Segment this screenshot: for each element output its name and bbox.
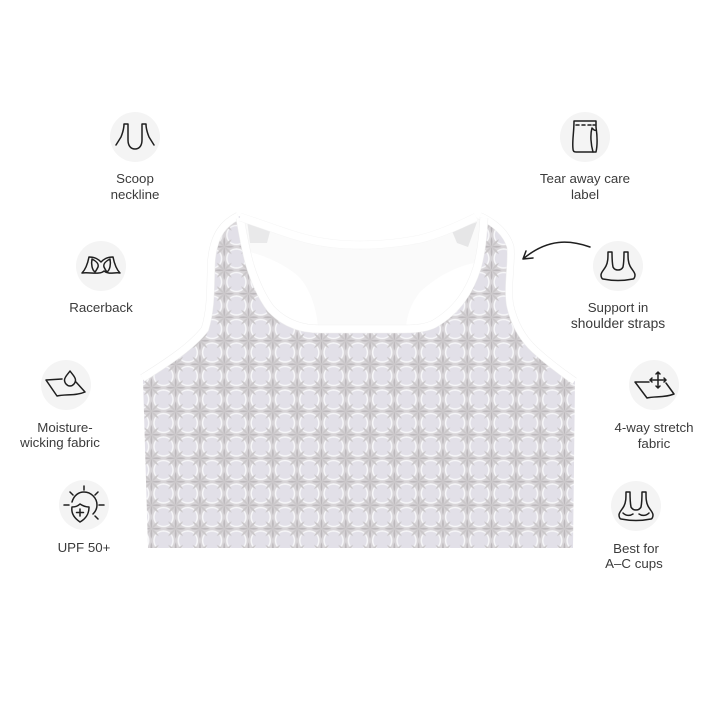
- feature: moisture-wicking fabric: [19, 360, 100, 450]
- label: 4-way stretch fabric: 4-way stretch: [614, 420, 694, 435]
- front neckline trim: [240, 218, 484, 329]
- feature: scoop neckline: [110, 112, 160, 202]
- label: tear away care label: label: [571, 187, 599, 202]
- label: scoop neckline: neckline: [111, 187, 159, 202]
- icon: racerback: [76, 241, 126, 291]
- back fabric: [240, 217, 484, 330]
- patterned body: [143, 216, 575, 548]
- label: racerback: Racerback: [69, 300, 133, 315]
- label: moisture-wicking fabric: Moisture-: [37, 420, 93, 435]
- feature: racerback: [69, 241, 133, 315]
- right mesh patch: [452, 222, 477, 247]
- arrow: points to shoulder strap: [523, 242, 590, 259]
- right strap and armhole trim: [480, 216, 574, 381]
- label: support in shoulder straps: shoulder straps: [571, 316, 665, 331]
- left strap and armhole trim: [142, 216, 238, 378]
- feature: UPF 50+: [58, 480, 111, 555]
- icon: scoop neckline: [110, 112, 160, 162]
- label: best for A–C cups: Best for: [613, 541, 659, 556]
- label: best for A–C cups: A–C cups: [605, 556, 663, 571]
- icon: fabric with four arrows: [629, 360, 679, 410]
- label: support in shoulder straps: Support in: [588, 300, 648, 315]
- feature: 4-way stretch fabric: [614, 360, 694, 451]
- icon: fabric with water drop: [41, 360, 91, 410]
- back neckline trim highlight: [240, 217, 476, 245]
- label: 4-way stretch fabric: fabric: [638, 436, 671, 451]
- left mesh patch: [247, 220, 272, 243]
- label: UPF 50+: UPF 50+: [58, 540, 111, 555]
- right armhole opening: [406, 262, 479, 327]
- label: moisture-wicking fabric: wicking fabric: [19, 435, 100, 450]
- icon: bra with supported straps: [593, 241, 643, 291]
- icon: sun and shield: [59, 480, 109, 530]
- left strap trim highlight: [142, 216, 238, 378]
- icon: bra with cups: [611, 481, 661, 531]
- left armhole opening: [250, 252, 318, 327]
- label: scoop neckline: Scoop: [116, 171, 154, 186]
- label: tear away care label: Tear away care: [540, 171, 630, 186]
- right strap trim highlight: [480, 216, 574, 381]
- sports bra garment: [142, 216, 575, 548]
- icon: care label: [560, 112, 610, 162]
- front neckline trim highlight: [240, 218, 484, 329]
- feature: tear away care label: [540, 112, 630, 202]
- feature: support in shoulder straps: [571, 241, 665, 331]
- feature: best for A–C cups: [605, 481, 663, 571]
- back neckline trim: [240, 217, 476, 245]
